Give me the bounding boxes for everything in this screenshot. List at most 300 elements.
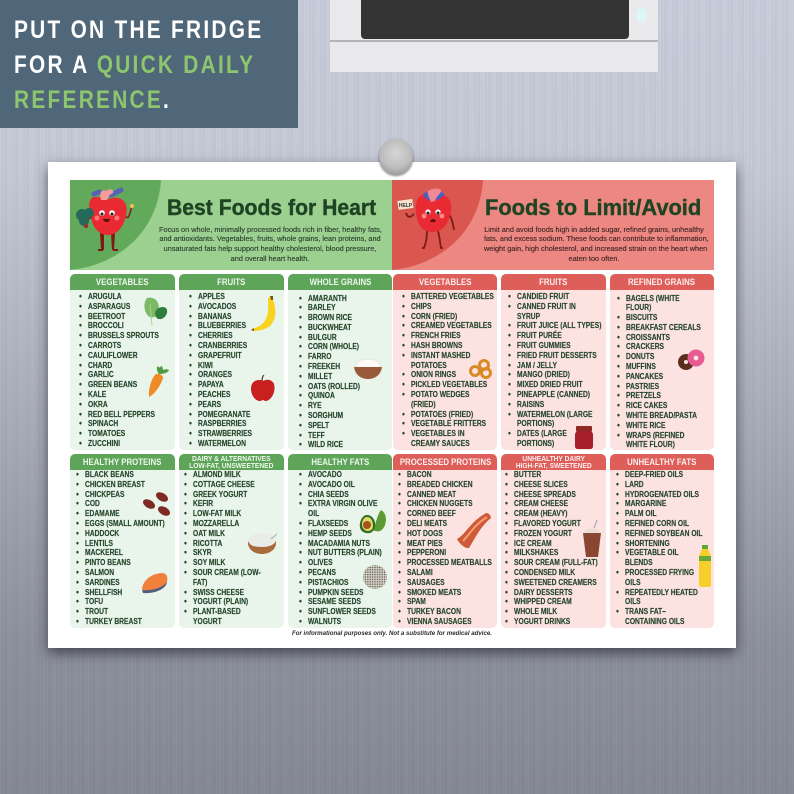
panel: healthy fats: • — [299, 557, 302, 567]
food list: FREEKEH — [308, 362, 340, 371]
panel: refined grains: • — [617, 292, 620, 302]
panel: fruits: • — [189, 379, 192, 389]
panel title — [501, 274, 606, 290]
panel: unhealthy fats: • — [616, 528, 618, 538]
food list: FRENCH FRIES — [410, 331, 460, 340]
panel: fruits: • — [189, 399, 192, 409]
panel: unhealthy dairy: • — [505, 528, 508, 538]
panel: dairy and alternatives — [179, 454, 284, 628]
food list: SHELLFISH — [85, 588, 122, 597]
panel: unhealthy dairy: • — [505, 567, 508, 577]
food list: EXTRA VIRGIN OLIVE — [308, 499, 377, 508]
panel: fruits: • — [189, 320, 192, 330]
food list: CHEESE SLICES — [514, 480, 568, 489]
food list: BROWN RICE — [308, 313, 352, 322]
panel: whole grains: • — [299, 312, 302, 322]
food list: TEFF — [308, 431, 325, 440]
food list: OILS — [624, 597, 640, 606]
food list: LOW-FAT MILK — [193, 509, 241, 518]
icon: leafy greens — [144, 298, 168, 326]
callout line 3: REFERENCE. — [14, 86, 171, 114]
panel: healthy proteins: • — [76, 606, 79, 616]
food list: VEGETABLES IN — [410, 429, 464, 438]
panel: unhealthy dairy: • — [505, 498, 508, 508]
icon: oil bottle — [699, 545, 711, 587]
panel: healthy proteins: • — [76, 538, 79, 548]
food list: SOUR CREAM (FULL-FAT) — [514, 558, 598, 567]
panel: vegetables: • — [79, 330, 82, 340]
panel: healthy proteins: • — [76, 596, 79, 606]
panel: healthy fats: • — [299, 489, 302, 499]
food list: CORN (FRIED) — [410, 312, 457, 321]
panel title: FRUITS — [217, 277, 246, 287]
panel: processed proteins: • — [398, 567, 400, 577]
food list: HASH BROWNS — [410, 341, 462, 350]
panel: healthy fats: • — [299, 469, 302, 479]
food list: SWEETENED CREAMERS — [514, 578, 597, 587]
food list: BANANAS — [198, 312, 232, 321]
food list: BRUSSELS SPROUTS — [88, 331, 159, 340]
panel: unhealthy dairy: • — [505, 616, 508, 626]
food list — [184, 469, 261, 626]
food list: SALAMI — [406, 568, 432, 577]
food list: WRAPS (REFINED — [626, 431, 685, 440]
panel: limit vegetables: • — [402, 340, 404, 350]
panel: vegetables: • — [79, 369, 82, 379]
panel: unhealthy fats — [610, 454, 714, 628]
panel: limit vegetables: • — [402, 428, 404, 438]
food list: YOGURT (PLAIN) — [193, 597, 248, 606]
panel: healthy proteins: • — [76, 528, 79, 538]
food list: WATERMELON (LARGE — [517, 410, 593, 419]
icon: apple — [251, 374, 274, 401]
food list: CREAM (HEAVY) — [514, 509, 568, 518]
food list: INSTANT MASHED — [410, 351, 470, 360]
panel: refined grains: • — [617, 381, 620, 391]
food list: SPELT — [308, 421, 329, 430]
food list: BATTERED VEGETABLES — [410, 292, 493, 301]
food list: DATES (LARGE — [517, 429, 567, 438]
panel: vegetables: • — [79, 389, 82, 399]
food list: SARDINES — [85, 578, 120, 587]
panel title: UNHEALTHY DAIRY — [522, 454, 585, 462]
panel: vegetables: • — [79, 438, 82, 448]
panel: refined grains: • — [617, 400, 620, 410]
food list: GARLIC — [88, 370, 114, 379]
panel: limit fruits: • — [508, 340, 511, 350]
panel: healthy fats: • — [299, 606, 302, 616]
food list: OILS — [624, 578, 640, 587]
food list: ALMOND MILK — [193, 470, 241, 479]
panel: fruits: • — [189, 291, 192, 301]
icon: sad heart mascot: HELP — [399, 203, 413, 209]
panel: processed proteins: • — [398, 557, 400, 567]
icon: avocado — [360, 510, 386, 534]
panel: whole grains: • — [299, 371, 302, 381]
panel title: WHOLE GRAINS — [309, 277, 371, 287]
food list: POTATOES — [410, 361, 446, 370]
icon: yogurt bowl — [248, 533, 278, 554]
food list: KEFIR — [193, 499, 213, 508]
panel: whole grains: • — [299, 400, 302, 410]
panel: healthy fats: • — [299, 596, 302, 606]
panel: unhealthy fats: • — [616, 567, 618, 577]
food list: BEETROOT — [88, 312, 125, 321]
food list: JAM / JELLY — [517, 361, 557, 370]
magnet — [379, 139, 413, 175]
food list: HYDROGENATED OILS — [624, 490, 699, 499]
food list — [79, 291, 159, 448]
panel: processed proteins: • — [398, 528, 400, 538]
food list: DELI MEATS — [406, 519, 447, 528]
food list: BLACK BEANS — [85, 470, 134, 479]
food list: BLENDS — [624, 558, 652, 567]
panel: refined grains: • — [617, 410, 620, 420]
food list: FRUIT PURÉE — [517, 331, 562, 340]
panel title — [610, 454, 714, 470]
food list: ASPARAGUS — [88, 302, 130, 311]
food list: SORGHUM — [308, 411, 343, 420]
food list: CORN (WHOLE) — [308, 342, 359, 351]
panel: dairy and alternatives: • — [184, 489, 187, 499]
panel: processed proteins: • — [398, 489, 400, 499]
fridge dispenser panel — [330, 0, 658, 72]
panel: healthy proteins — [70, 454, 175, 628]
panel: unhealthy fats: • — [616, 587, 618, 597]
food list: PAPAYA — [198, 380, 224, 389]
food list: WHITE BREAD/PASTA — [626, 411, 697, 420]
food list: DONUTS — [626, 352, 654, 361]
icon: rice bowl — [354, 358, 382, 379]
dispenser divider — [330, 40, 658, 42]
food list: ICE CREAM — [514, 539, 552, 548]
panel: healthy fats: • — [299, 547, 302, 557]
panel title — [70, 454, 175, 470]
icon: jam jar — [575, 426, 593, 449]
panel: whole grains: • — [299, 420, 302, 430]
food list: PEPPERONI — [406, 548, 446, 557]
panel: fruits: • — [189, 369, 192, 379]
food list: BISCUITS — [626, 313, 657, 322]
panel: fruits: • — [189, 438, 192, 448]
icon: donuts — [678, 350, 704, 370]
panel: limit vegetables: • — [402, 291, 404, 301]
panel: processed proteins: • — [398, 498, 400, 508]
food list: CONDENSED MILK — [514, 568, 575, 577]
panel: healthy fats: • — [299, 528, 302, 538]
food list: RED BELL PEPPERS — [88, 410, 155, 419]
panel: unhealthy dairy: • — [505, 596, 508, 606]
food list: SALMON — [85, 568, 114, 577]
food list: CREAM CHEESE — [514, 499, 568, 508]
food list: CHIPS — [410, 302, 431, 311]
panel: refined grains: • — [617, 332, 620, 342]
food list: BACON — [406, 470, 431, 479]
panel: fruits — [179, 274, 284, 450]
panel: unhealthy dairy: • — [505, 538, 508, 548]
food list: OATS (ROLLED) — [308, 382, 360, 391]
panel: fruits: • — [189, 340, 192, 350]
food list: TROUT — [85, 607, 108, 616]
food list: CREAMED VEGETABLES — [410, 321, 491, 330]
food list: TURKEY BREAST — [85, 617, 142, 626]
panel: processed proteins: • — [398, 479, 400, 489]
panel title — [393, 274, 497, 290]
food list: WHOLE MILK — [514, 607, 557, 616]
panel: whole grains: • — [299, 410, 302, 420]
food list: HOT DOGS — [406, 529, 442, 538]
panel: limit fruits: • — [508, 428, 511, 438]
food list: TURKEY BACON — [406, 607, 460, 616]
panel: processed proteins: • — [398, 596, 400, 606]
panel: limit fruits: • — [508, 291, 511, 301]
panel: dairy and alternatives: • — [184, 508, 187, 518]
food list: FARRO — [308, 352, 331, 361]
panel title: VEGETABLES — [419, 277, 471, 287]
food list: OKRA — [88, 400, 108, 409]
panel: vegetables: • — [79, 399, 82, 409]
food list: PINEAPPLE (CANNED) — [517, 390, 590, 399]
food list: TRANS FAT– — [624, 607, 665, 616]
food list: CHICKPEAS — [85, 490, 125, 499]
panel: unhealthy fats: • — [616, 469, 618, 479]
food list: PROCESSED FRYING — [624, 568, 694, 577]
panel: unhealthy fats: • — [616, 489, 618, 499]
food list: SYRUP — [517, 312, 540, 321]
food list: WATERMELON — [198, 439, 246, 448]
panel: limit foods header — [392, 180, 714, 270]
food list: REFINED CORN OIL — [624, 519, 689, 528]
food list: PEACHES — [198, 390, 230, 399]
panel: vegetables: • — [79, 428, 82, 438]
panel title — [393, 454, 497, 470]
food list: RICOTTA — [193, 539, 222, 548]
dispenser screen — [361, 0, 629, 39]
icon: onion rings — [469, 359, 492, 379]
panel: healthy proteins: • — [76, 547, 79, 557]
food list: RYE — [308, 401, 322, 410]
food list: BAGELS (WHITE — [626, 294, 680, 302]
food list: PALM OIL — [624, 509, 656, 518]
food list: FRUIT GUMMIES — [517, 341, 571, 350]
panel: unhealthy fats: • — [616, 547, 618, 557]
panel: vegetables: • — [79, 350, 82, 360]
food list: DAIRY DESSERTS — [514, 588, 573, 597]
food list: CORNED BEEF — [406, 509, 455, 518]
food list: MOZZARELLA — [193, 519, 239, 528]
food list: REFINED SOYBEAN OIL — [624, 529, 702, 538]
panel: dairy and alternatives: • — [184, 479, 187, 489]
panel: dairy and alternatives: • — [184, 606, 187, 616]
food list: SHORTENING — [624, 539, 669, 548]
food list: DEEP-FRIED OILS — [624, 470, 683, 479]
panel title — [501, 454, 606, 470]
panel title: PROCESSED PROTEINS — [400, 457, 491, 467]
food list: PANCAKES — [626, 372, 663, 381]
food list: EDAMAME — [85, 509, 120, 518]
food list: QUINOA — [308, 391, 335, 400]
panel: whole grains: • — [299, 381, 302, 391]
panel: limit fruits: • — [508, 350, 511, 360]
icon: milkshake — [583, 520, 601, 557]
panel: unhealthy fats: • — [616, 538, 618, 548]
panel: healthy fats: • — [299, 498, 302, 508]
panel: processed proteins: • — [398, 469, 400, 479]
food list: MARGARINE — [624, 499, 666, 508]
panel: limit vegetables: • — [402, 350, 404, 360]
food list: FLAVORED YOGURT — [514, 519, 581, 528]
icon: chia seeds — [363, 565, 387, 589]
food list: PORTIONS) — [517, 439, 554, 448]
panel: refined grains — [610, 274, 714, 450]
food list: SPINACH — [88, 419, 118, 428]
food list: KIWI — [198, 361, 213, 370]
panel: healthy proteins: • — [76, 616, 79, 626]
food list: COD — [85, 499, 100, 508]
panel: unhealthy fats: • — [616, 606, 618, 616]
panel: unhealthy dairy: • — [505, 518, 508, 528]
food list: FRIED FRUIT DESSERTS — [517, 351, 597, 360]
food list — [398, 469, 492, 626]
food list: PEARS — [198, 400, 221, 409]
panel: healthy fats: • — [299, 567, 302, 577]
panel: healthy fats — [288, 454, 392, 628]
paper card — [48, 162, 736, 648]
food list: FLAXSEEDS — [308, 519, 348, 528]
food list: MUFFINS — [626, 362, 656, 371]
food list: POTATOES (FRIED) — [410, 410, 473, 419]
food list: SAUSAGES — [406, 578, 444, 587]
panel: whole grains: • — [299, 332, 302, 342]
food list: FLOUR) — [626, 303, 651, 312]
panel: limit vegetables: • — [402, 409, 404, 419]
panel: whole grains: • — [299, 361, 302, 371]
food list: HADDOCK — [85, 529, 119, 538]
food list: CROISSANTS — [626, 333, 670, 342]
food list: CHIA SEEDS — [308, 490, 349, 499]
panel: healthy proteins: • — [76, 479, 79, 489]
panel: fruits: • — [189, 311, 192, 321]
panel: processed proteins: • — [398, 508, 400, 518]
food list: CHARD — [88, 361, 112, 370]
food list — [189, 291, 252, 448]
panel title: HIGH-FAT, SWEETENED — [516, 461, 591, 470]
panel title — [288, 454, 392, 470]
food list: WHITE FLOUR) — [626, 440, 675, 449]
description: foods to limit: weight gain, high cholesterol, and increased strain on the heart when — [484, 244, 707, 253]
food list: BLUEBERRIES — [198, 321, 246, 330]
food list: TOMATOES — [88, 429, 125, 438]
food list: MILKSHAKES — [514, 548, 558, 557]
panel: limit vegetables: • — [402, 389, 404, 399]
food list: CHEESE SPREADS — [514, 490, 576, 499]
panel: limit fruits: • — [508, 360, 511, 370]
panel: unhealthy dairy: • — [505, 508, 508, 518]
panel: vegetables: • — [79, 418, 82, 428]
food list: YOGURT DRINKS — [514, 617, 570, 626]
panel: limit fruits: • — [508, 369, 511, 379]
food list: MANGO (DRIED) — [517, 370, 570, 379]
panel: whole grains: • — [299, 390, 302, 400]
panel: refined grains: • — [617, 312, 620, 322]
red corner shape — [392, 180, 483, 270]
food list: SKYR — [193, 548, 212, 557]
heading: best foods for heart: Best Foods for Heart — [167, 195, 376, 220]
panel title — [179, 454, 284, 470]
panel: refined grains: • — [617, 371, 620, 381]
food list: OIL — [308, 509, 319, 518]
food list: FRUIT JUICE (ALL TYPES) — [517, 321, 601, 330]
panel: healthy fats: • — [299, 538, 302, 548]
heading: foods to limit: Foods to Limit/Avoid — [485, 195, 701, 220]
panel: refined grains: • — [617, 341, 620, 351]
panel title: LOW-FAT, UNSWEETENED — [189, 461, 274, 470]
icon: sad heart mascot — [397, 188, 455, 249]
panel: unhealthy fats: • — [616, 508, 618, 518]
panel: dairy and alternatives: • — [184, 528, 187, 538]
food list: CHICKEN BREAST — [85, 480, 145, 489]
icon: carrot — [148, 366, 169, 397]
panel: refined grains: • — [617, 420, 620, 430]
food list: CHICKEN NUGGETS — [406, 499, 472, 508]
panel: healthy fats: • — [299, 616, 302, 626]
panel: refined grains: • — [617, 390, 620, 400]
icon: happy heart mascot — [76, 188, 134, 251]
food list: NUT BUTTERS (PLAIN) — [308, 548, 382, 557]
food list: PUMPKIN SEEDS — [308, 588, 364, 597]
panel: unhealthy dairy — [501, 454, 606, 628]
food list: BUTTER — [514, 470, 541, 479]
panel: whole grains: • — [299, 292, 302, 302]
panel: refined grains: • — [617, 351, 620, 361]
panel: limit vegetables: • — [402, 311, 404, 321]
panel: limit vegetables: • — [402, 369, 404, 379]
panel: limit fruits: • — [508, 301, 511, 311]
food list: CANNED FRUIT IN — [517, 302, 576, 311]
food list: KALE — [88, 390, 106, 399]
description: best foods: unsaturated fats help support healthy cholesterol, blood pressure, — [164, 244, 376, 253]
panel: fruits: • — [189, 409, 192, 419]
panel: limit vegetables: • — [402, 379, 404, 389]
panel: unhealthy dairy: • — [505, 469, 508, 479]
food list: AVOCADOS — [198, 302, 236, 311]
panel: unhealthy dairy: • — [505, 547, 508, 557]
panel: processed proteins: • — [398, 587, 400, 597]
description: foods to limit: Limit and avoid foods high in added sugar, refined grains, unhealthy — [484, 224, 704, 234]
food list: SWISS CHEESE — [193, 588, 244, 597]
description: foods to limit: fats, and excess sodium. These foods can contribute to inflammation, — [484, 234, 709, 243]
food list: PORTIONS) — [517, 419, 554, 428]
food list — [402, 291, 494, 448]
panel: processed proteins: • — [398, 577, 400, 587]
panel: healthy fats: • — [299, 518, 302, 528]
panel: dairy and alternatives: • — [184, 518, 187, 528]
panel: dairy and alternatives: • — [184, 538, 187, 548]
food list: CANNED MEAT — [406, 490, 456, 499]
panel title: DAIRY & ALTERNATIVES — [192, 454, 271, 462]
food list: CRANBERRIES — [198, 341, 247, 350]
panel: dairy and alternatives: • — [184, 498, 187, 508]
panel: limit vegetables: • — [402, 418, 404, 428]
panel: refined grains: • — [617, 322, 620, 332]
panel: fruits: • — [189, 389, 192, 399]
food list: GREEN BEANS — [88, 380, 137, 389]
panel: vegetables: • — [79, 360, 82, 370]
panel: processed proteins: • — [398, 606, 400, 616]
food list: WALNUTS — [308, 617, 341, 626]
panel title: HEALTHY PROTEINS — [83, 457, 162, 467]
panel: whole grains: • — [299, 430, 302, 440]
